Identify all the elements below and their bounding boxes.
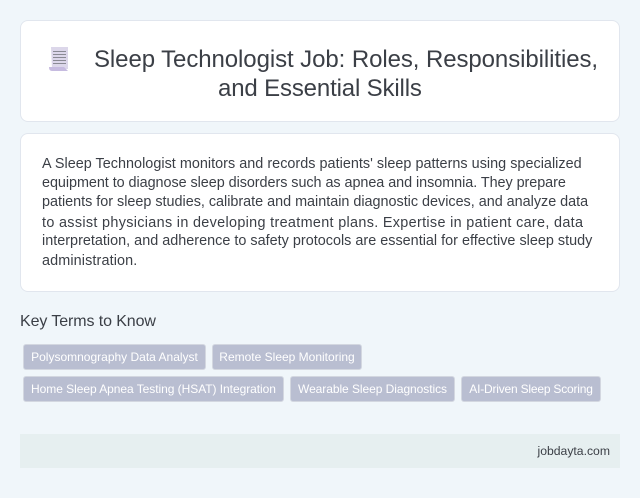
tag: Remote Sleep Monitoring: [219, 350, 355, 364]
title line 1: Sleep Technologist Job: Roles, Responsibilities,: [94, 46, 598, 73]
description text: [42, 156, 592, 269]
panel: title card: [20, 20, 620, 122]
tag: [23, 376, 284, 402]
description text: A Sleep Technologist monitors and records patients' sleep patterns using specialized: [42, 156, 582, 172]
title: [94, 46, 598, 102]
tag: [461, 376, 601, 402]
footer bar: [20, 434, 620, 468]
description text: interpretation, and adherence to safety protocols are essential for effective sleep study: [42, 233, 592, 249]
tag: [23, 344, 206, 370]
heading: key terms: Key Terms to Know: [20, 313, 156, 330]
description text: patients for sleep studies, calibrate and maintain diagnostic devices, and analyze data: [42, 194, 588, 210]
icon: document scroll: [49, 47, 68, 71]
tag list: [23, 344, 601, 402]
tag: [290, 376, 455, 402]
tag: [212, 344, 362, 370]
tag: Home Sleep Apnea Testing (HSAT) Integration: [31, 382, 276, 396]
panel: description card: [20, 133, 620, 292]
tag: AI-Driven Sleep Scoring: [469, 382, 593, 396]
description text: equipment to diagnose sleep disorders such as apnea and insomnia. They prepare: [42, 175, 566, 191]
tag: Wearable Sleep Diagnostics: [298, 382, 447, 396]
description text: to assist physicians in developing treatment plans. Expertise in patient care, data: [42, 215, 583, 231]
tag: Polysomnography Data Analyst: [31, 350, 198, 364]
title line 2: and Essential Skills: [218, 75, 422, 102]
description text: administration.: [42, 253, 137, 269]
footer credit: jobdayta.com: [538, 444, 610, 458]
